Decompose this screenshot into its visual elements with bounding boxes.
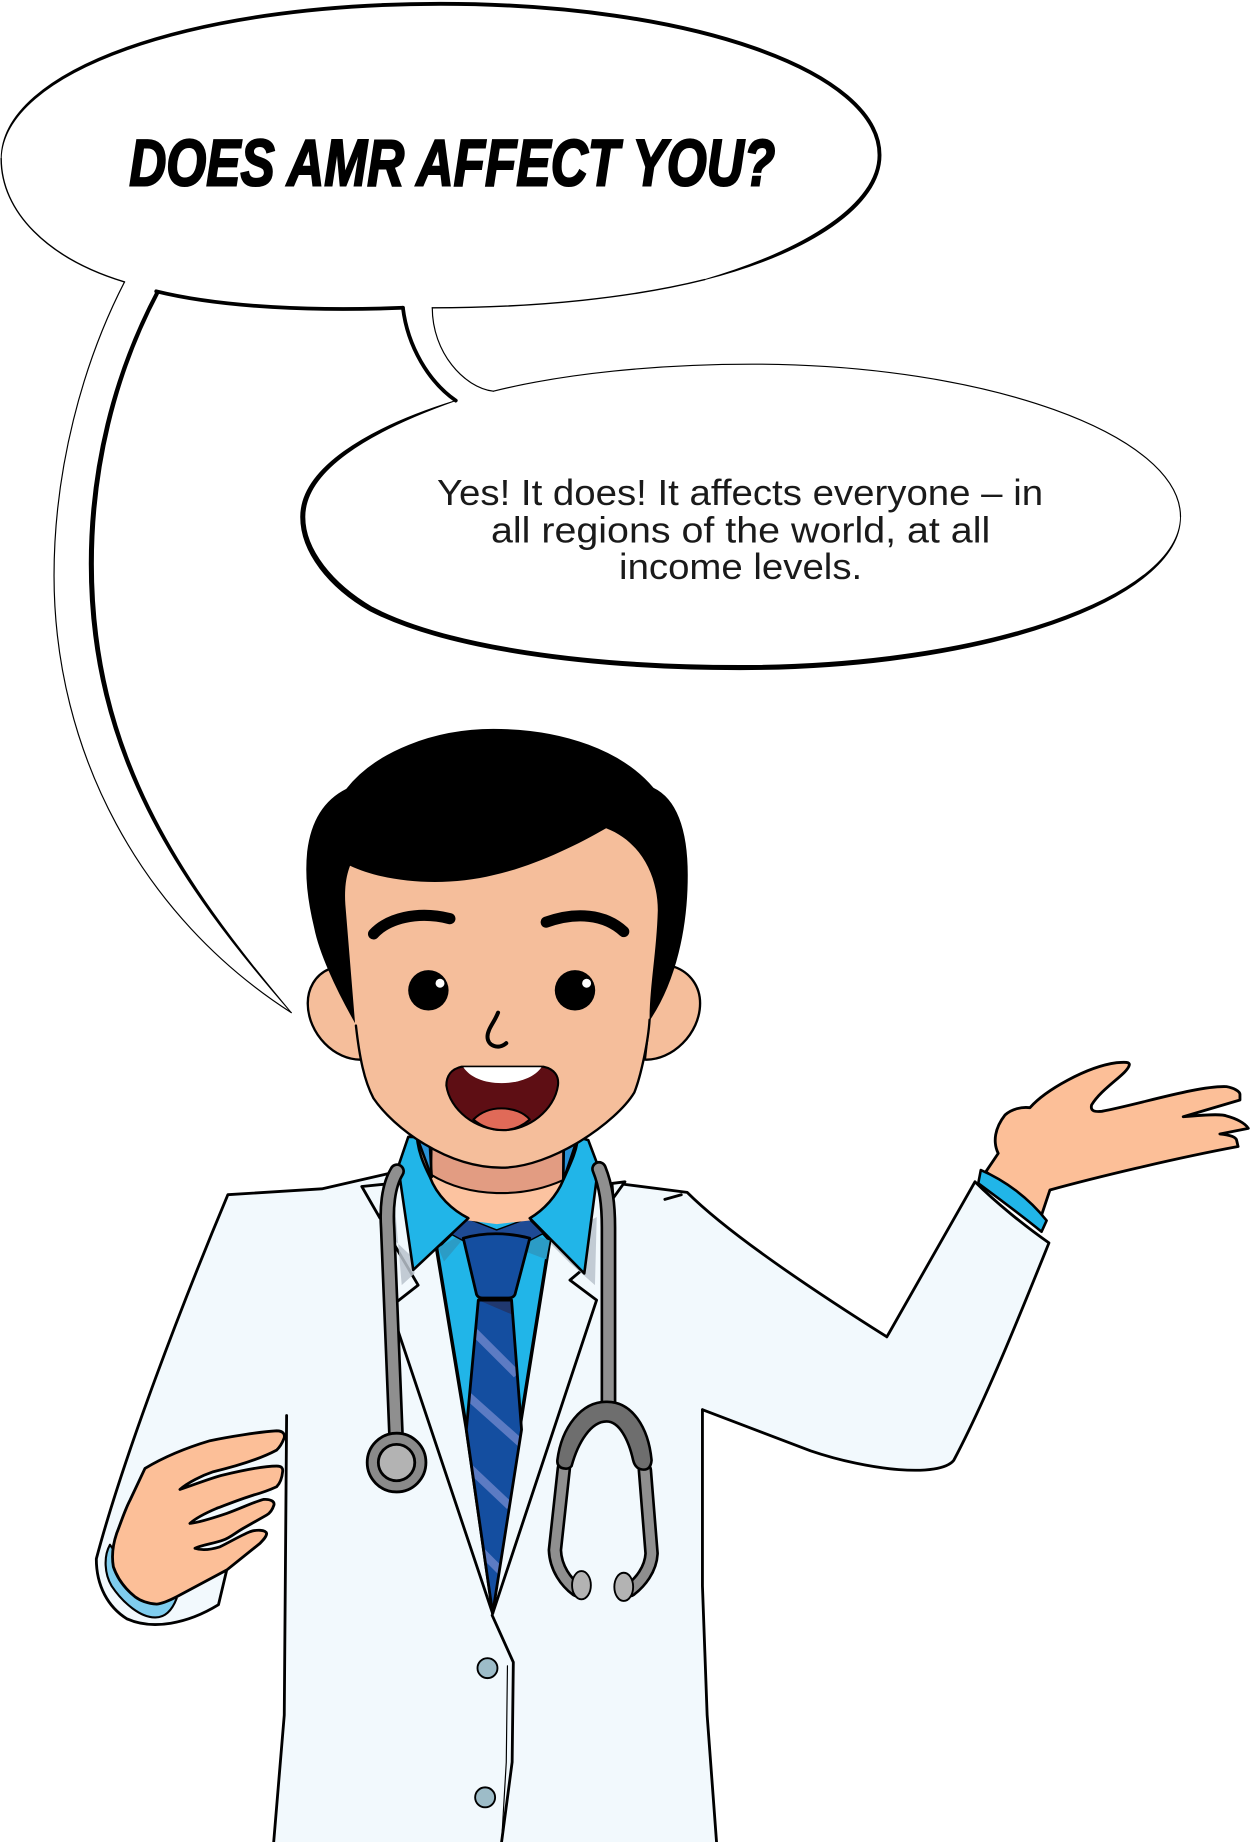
right shirt cuff xyxy=(978,1170,1047,1232)
eyes xyxy=(408,970,595,1011)
speech bubbles xyxy=(1,2,1181,1013)
nose xyxy=(487,1013,506,1047)
shirt collar xyxy=(398,1137,598,1273)
answer text: all regions of the world, at all xyxy=(491,510,990,551)
eyebrows xyxy=(374,915,624,934)
shirt xyxy=(437,1218,550,1610)
answer text: income levels. xyxy=(619,546,862,587)
answer text xyxy=(437,472,1043,587)
ears xyxy=(308,967,700,1060)
coat lapels xyxy=(362,1182,625,1842)
hair xyxy=(307,730,687,1026)
stethoscope xyxy=(367,1169,652,1601)
title: DOES AMR AFFECT YOU? xyxy=(129,126,775,200)
necktie xyxy=(450,1218,543,1614)
face xyxy=(345,828,658,1168)
coat buttons xyxy=(475,1658,497,1807)
mouth xyxy=(446,1067,558,1130)
neck xyxy=(413,1140,581,1224)
face outline xyxy=(356,1020,650,1168)
answer text: Yes! It does! It affects everyone – in xyxy=(437,472,1043,513)
left hand xyxy=(113,1431,284,1604)
lab coat xyxy=(96,1172,1049,1842)
doctor character xyxy=(96,730,1248,1842)
stethoscope binaurals xyxy=(555,1402,652,1601)
left cuff xyxy=(106,1545,177,1617)
stethoscope chest piece xyxy=(367,1433,426,1492)
right hand xyxy=(986,1062,1248,1215)
collar shadows xyxy=(395,1203,597,1285)
